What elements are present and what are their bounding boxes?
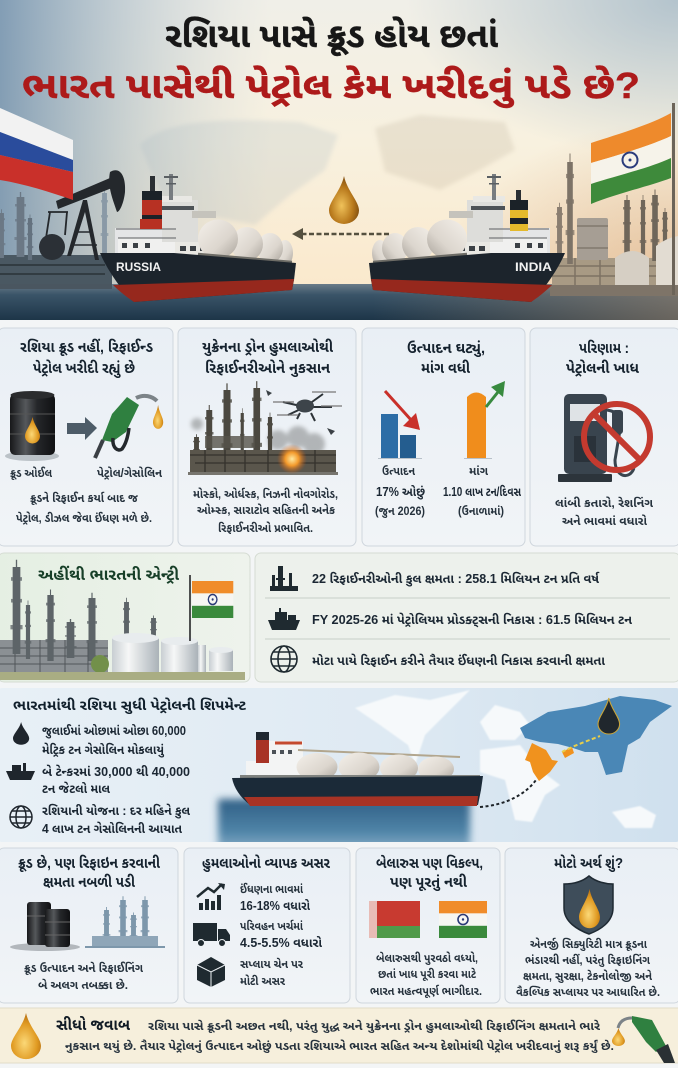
- title: ભારત પાસેથી પેટ્રોલ કેમ ખરીદવું પડે છે?: [22, 64, 640, 108]
- map: India: [525, 743, 574, 781]
- text: fuel prices: 16-18% વધારો: [240, 898, 310, 913]
- description: [24, 961, 144, 992]
- icon: box: [197, 957, 225, 987]
- icon: fuel nozzle: [95, 396, 163, 458]
- icon: truck: [193, 923, 230, 946]
- description: ઓમ્સ્ક, સારાટોવ સહિતની અનેક: [197, 503, 336, 517]
- panel: Belarus: [356, 848, 500, 1003]
- heading: [407, 340, 485, 377]
- refinery under attack: [188, 381, 338, 475]
- icon: barrels: [10, 902, 80, 951]
- Indian flag with pole: [591, 103, 675, 295]
- panel: India's capacity facts: [255, 553, 678, 682]
- icon: refinery: [270, 566, 298, 591]
- text: capacity: 22 રિફાઈનરીઓની કુલ ક્ષમતા : 258.1 મિલિયન ટન પ્રતિ વર્ષ: [312, 571, 600, 587]
- bar chart: production: [378, 391, 422, 458]
- heading: હુમલાઓનો વ્યાપક અસર: [202, 855, 331, 872]
- heading: [566, 339, 639, 377]
- text: supply chain: સપ્લાય ચેન પર: [240, 957, 303, 971]
- description: વૈકલ્પિક સપ્લાયર પર આધારિત છે.: [516, 985, 660, 999]
- explosion: [277, 444, 307, 474]
- heading: ક્રૂડ છે, પણ રિફાઇન કરવાની: [18, 854, 161, 872]
- icon: drone: [266, 390, 342, 435]
- icon: fuel nozzle with drop: [612, 1016, 675, 1063]
- description: રિફાઈનરીઓ પ્રભાવિત.: [218, 521, 313, 535]
- heading: બેલારુસ પણ વિકલ્પ,: [376, 854, 483, 872]
- oil drop pin: [598, 698, 620, 734]
- icon: Belarus flag: [369, 901, 420, 938]
- answer text: નુકસાન થયું છે. તૈયાર પેટ્રોલનું ઉત્પાદન ઓછું પડતા રશિયાએ ભારત સહિત અન્ય દેશોમાંથી પેટ્રોલ ખરીદવાનું શરૂ કર્યું છે.: [65, 1039, 614, 1054]
- item: Russia's plan: 4 લાખ ટન ગેસોલિનની આયાત: [42, 820, 182, 836]
- refinery illustration: [0, 560, 245, 680]
- text: transport: [240, 919, 322, 950]
- heading: માંગ વધી: [421, 360, 471, 377]
- panel: shortage: [530, 328, 678, 546]
- icon: Indian flag: [439, 901, 487, 938]
- text: fuel prices: [240, 882, 310, 913]
- icon: shield with drop: [564, 876, 613, 934]
- item: two tankers: [6, 763, 190, 796]
- heading: પેટ્રોલની ખાધ: [566, 359, 639, 377]
- callout: direct answer: [0, 1008, 678, 1063]
- description: અને ભાવમાં વધારો: [562, 514, 648, 528]
- India ship: INDIA: [515, 260, 552, 274]
- description: છતાં ખાધ પૂરી કરવા માટે: [378, 967, 476, 982]
- item: two tankers: ટન જેટલો માલ: [42, 780, 110, 796]
- title: [22, 16, 640, 108]
- map: Asia: [520, 696, 672, 775]
- icon: prohibition sign: [584, 404, 650, 470]
- heading: યુક્રેનના ડ્રોન હુમલાઓથી: [202, 338, 334, 356]
- heading: ભારતમાંથી રશિયા સુધી પેટ્રોલની શિપમેન્ટ: [13, 696, 246, 714]
- description: ક્રૂડ ઉત્પાદન અને રિફાઈનિંગ: [24, 961, 144, 976]
- description: [370, 951, 482, 999]
- heading: [376, 854, 483, 891]
- panel: production and demand: [362, 328, 525, 546]
- figures: 17% ઓછું: [376, 484, 425, 500]
- heading: રશિયા ક્રૂડ નહીં, રિફાઈન્ડ: [20, 338, 153, 356]
- figures: ઉત્પાદન: [382, 464, 415, 478]
- heading: અહીંથી ભારતની એન્ટ્રી: [38, 565, 179, 584]
- India ship: [369, 174, 565, 302]
- description: મોસ્કો, ઓર્ધસ્ક, નિઝની નોવગોરોડ,: [193, 487, 338, 501]
- item: gasoline shipped: [13, 722, 186, 758]
- heading: પરિણામ :: [579, 339, 629, 357]
- Russian flag: [0, 108, 73, 200]
- description: એનર્જી સિક્યુરિટી માત્ર ક્રૂડના: [530, 937, 648, 952]
- icon: oil barrel: [5, 391, 59, 461]
- description: [193, 487, 338, 535]
- description: બે અલગ તબક્કા છે.: [38, 978, 128, 992]
- item: gasoline shipped: જુલાઈમાં ઓછામાં ઓછા 60,000: [42, 723, 186, 739]
- labels: પેટ્રોલ/ગેસોલિન: [97, 466, 162, 480]
- heading: પેટ્રોલ ખરીદી રહ્યું છે: [33, 359, 135, 378]
- heading: ઉત્પાદન ઘટ્યું,: [407, 340, 485, 357]
- icon: chart: [197, 883, 225, 910]
- text: exports: FY 2025-26 માં પેટ્રોલિયમ પ્રોડક્ટ્સની નિકાસ : 61.5 મિલિયન ટન: [312, 611, 632, 628]
- Russia ship: RUSSIA: [116, 260, 161, 274]
- panel: crude vs refined: [0, 328, 173, 546]
- labels: [10, 466, 162, 481]
- text: supply chain: [240, 957, 303, 988]
- Russia ship: [100, 174, 296, 302]
- bar chart: demand: [464, 381, 505, 458]
- panel: wider impact: [184, 848, 350, 1003]
- item: Russia's plan: [10, 802, 190, 836]
- panel: shipment: [0, 688, 678, 859]
- oil pump jack: [39, 170, 125, 260]
- pale refinery: [85, 896, 165, 948]
- heading: [20, 338, 153, 378]
- icon: fuel pump: [558, 394, 634, 482]
- description: [16, 491, 152, 525]
- description: [555, 496, 654, 528]
- heading: ક્ષમતા નબળી પડી: [43, 873, 136, 891]
- icon: ship: [268, 608, 300, 630]
- text: fuel prices: ઈંધણના ભાવમાં: [240, 882, 304, 896]
- hero banner: [0, 0, 678, 320]
- description: ક્ષમતા, સુરક્ષા, ટેકનોલોજી અને: [523, 969, 652, 984]
- heading: પણ પૂરતું નથી: [390, 874, 468, 891]
- panel: refining capacity weak: [0, 848, 178, 1003]
- oil drop: [329, 176, 359, 224]
- figures: [375, 464, 521, 519]
- tanker: [232, 732, 483, 806]
- arrow: [67, 417, 97, 440]
- panel: India's entry: [0, 553, 250, 682]
- description: ભારત મહત્વપૂર્ણ ભાગીદાર.: [370, 984, 482, 999]
- right refinery: [550, 154, 678, 296]
- figures: (ઉનાળામાં): [458, 504, 504, 518]
- panel: bigger meaning: [505, 848, 678, 1003]
- labels: ક્રૂડ ઓઈલ: [10, 467, 53, 481]
- icon: globe: [271, 646, 297, 672]
- world map: [355, 690, 672, 828]
- text: transport: 4.5-5.5% વધારો: [240, 935, 322, 950]
- text: transport: પરિવહન ખર્ચમાં: [240, 919, 304, 933]
- sea: [212, 792, 476, 842]
- figures: 1.10 લાખ ટન/દિવસ: [443, 484, 521, 499]
- description: બેલારુસથી પુરવઠો વધ્યો,: [376, 951, 478, 966]
- figures: (જુન 2026): [375, 506, 425, 519]
- title: રશિયા પાસે ક્રૂડ હોય છતાં: [165, 16, 498, 56]
- heading: મોટો અર્થ શું?: [554, 854, 623, 872]
- route: [480, 736, 600, 807]
- Indian flag: [189, 575, 233, 641]
- answer text: રશિયા પાસે ક્રૂડની અછત નથી, પરંતુ યુદ્ધ અને યુક્રેનના ડ્રોન હુમલાઓથી રિફાઈનિંગ ક્ષમતાને ભારે: [148, 1019, 601, 1034]
- left refinery: [0, 188, 112, 289]
- heading: [202, 338, 334, 377]
- text: ability: મોટા પાયે રિફાઈન કરીને તૈયાર ઈંધણની નિકાસ કરવાની ક્ષમતા: [312, 652, 605, 668]
- description: પેટ્રોલ, ડીઝલ જેવા ઈંધણ મળે છે.: [16, 511, 152, 525]
- heading: રિફાઈનરીઓને નુકસાન: [205, 359, 331, 377]
- description: લાંબી કતારો, રેશનિંગ: [555, 496, 654, 510]
- item: Russia's plan: રશિયાની યોજના : દર મહિને કુલ: [42, 802, 190, 819]
- item: two tankers: બે ટેન્કરમાં 30,000 થી 40,000: [42, 763, 190, 779]
- heading: સીધો જવાબ: [56, 1015, 130, 1034]
- description: ક્રૂડને રિફાઈન કર્યા બાદ જ: [30, 491, 139, 506]
- answer text: [65, 1019, 614, 1054]
- dashed arrow: [292, 228, 389, 240]
- icon: golden drop: [11, 1013, 41, 1059]
- text: supply chain: મોટી અસર: [240, 974, 285, 988]
- panel: drone attacks: [178, 328, 356, 546]
- description: [516, 937, 660, 999]
- description: ભંડારથી નહીં, પરંતુ રિફાઇનિંગ: [525, 953, 651, 968]
- item: gasoline shipped: મેટ્રિક ટન ગેસોલિન મોકલાયું: [42, 741, 165, 758]
- heading: [18, 854, 161, 891]
- figures: માંગ: [469, 465, 489, 478]
- sea: [0, 284, 678, 320]
